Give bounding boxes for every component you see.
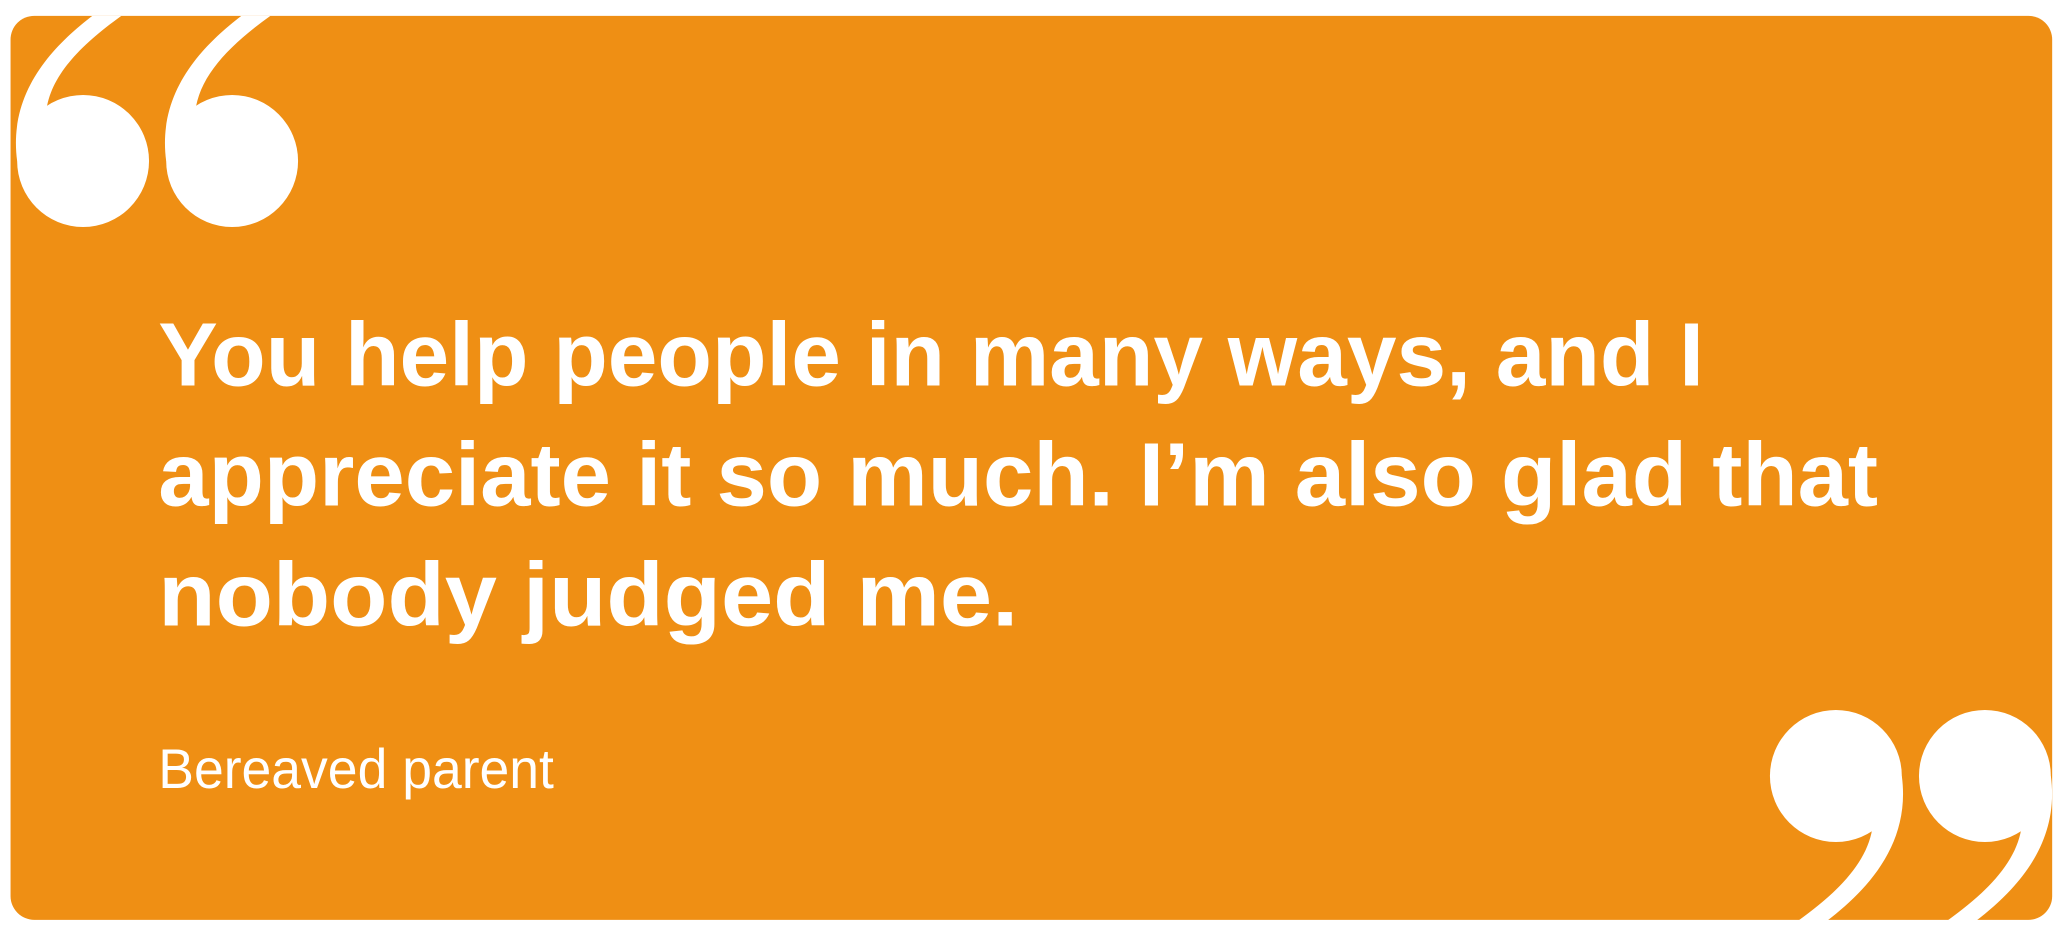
text block: quote: You help people in many ways, and I xyxy=(158,305,1704,405)
icon: opening quotation marks xyxy=(16,16,298,227)
text block: quote xyxy=(158,305,1878,646)
text block: attribution: Bereaved parent xyxy=(158,738,554,800)
icon: closing quotation marks xyxy=(1770,710,2052,921)
text block: quote: appreciate it so much. I’m also glad that xyxy=(158,425,1878,525)
text block: quote: nobody judged me. xyxy=(158,546,1018,646)
